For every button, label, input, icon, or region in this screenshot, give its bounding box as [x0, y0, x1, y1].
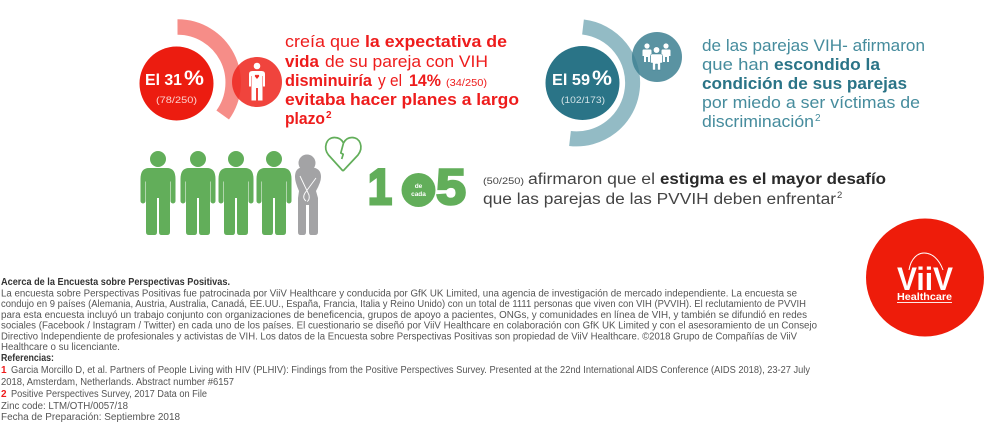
number: 1: 1 — [368, 159, 392, 215]
text: 31% description: y el — [378, 72, 402, 90]
circle: 31% badge: El 31 — [145, 72, 182, 89]
badge: de cada: cada — [411, 191, 426, 198]
text: 31% description: creía que — [285, 33, 360, 51]
text: 31% description: disminuiría — [285, 72, 373, 90]
text: 31% description: 14% — [409, 72, 441, 90]
text: 59% description: que han — [702, 56, 769, 74]
text: reference list: Positive Perspectives Survey, 2017 Data on File — [11, 389, 207, 400]
panel: 31% statistic — [140, 27, 519, 128]
text block: about the survey — [1, 277, 817, 423]
icon: grey person with crossed arms — [295, 154, 321, 235]
panel: 59% statistic — [546, 27, 925, 139]
text: 31% description — [285, 33, 519, 128]
text: 59% description: de las parejas VIH- afirmaron — [702, 37, 925, 55]
circle: 31% badge — [140, 46, 214, 120]
text: zinc code: Zinc code: LTM/OTH/0057/18 — [1, 401, 128, 412]
arc: red progress ring — [178, 27, 233, 115]
text: reference list: 1 — [1, 365, 7, 376]
circle: 59% badge: El 59 — [552, 72, 590, 89]
heading: about the survey: Acerca de la Encuesta sobre Perspectivas Positivas. — [1, 277, 230, 288]
icon: man with heart — [232, 57, 282, 107]
circle: 59% badge: % — [592, 67, 612, 90]
text: stigma description: estigma es el mayor desafío — [660, 171, 886, 188]
text: 59% description: condición de sus parejas — [702, 75, 907, 93]
text: 59% description: 2 — [815, 113, 821, 124]
text: survey paragraph: condujo en 9 países (Alemania, Austria, Australia, Canadá, EE.UU., España, Francia, Italia y Reino Unido) con un total de 1111 personas que viven con VIH (PVVIH). El reclutamiento de PVVIH — [1, 299, 806, 310]
number: 5: 5 — [436, 159, 466, 215]
icon: broken heart — [326, 138, 361, 171]
text: 31% description: 2 — [326, 110, 332, 121]
text: 59% description: escondido la — [774, 56, 881, 74]
text: 59% description: discriminación — [702, 113, 814, 131]
text: stigma description: que las parejas de las PVVIH deben enfrentar — [483, 191, 836, 208]
circle: 31% badge: % — [184, 67, 204, 90]
text: 59% description: por miedo a ser víctimas de — [702, 94, 920, 112]
badge: de cada — [402, 173, 436, 207]
text: survey paragraph — [1, 288, 817, 353]
text: stigma description: afirmaron que el — [528, 171, 655, 188]
text: 31% description: evitaba hacer planes a largo — [285, 91, 519, 109]
badge: de cada: de — [415, 183, 423, 190]
text: survey paragraph: sociales (Facebook / Instagram / Twitter) en cada uno de los países. El cuestionario se diseñó por ViiV Healthcare en colaboración con GfK UK Limited y con el asesoramiento de un Consejo — [1, 320, 817, 332]
text: preparation date: Fecha de Preparación: Septiembre 2018 — [1, 412, 180, 423]
text: 31% description: plazo — [285, 110, 325, 128]
text: reference list: 2 — [1, 389, 7, 400]
text: stigma description: (50/250) — [483, 176, 524, 186]
text: survey paragraph: Healthcare o su licenciante. — [1, 342, 120, 353]
heading: references: Referencias: — [1, 353, 54, 364]
text: 31% description: vida — [285, 53, 320, 71]
circle: 59% badge: (102/173) — [561, 95, 605, 106]
logo: ViiV Healthcare: Healthcare — [897, 292, 952, 303]
circle: 59% badge — [546, 46, 620, 120]
text: 31% description: (34/250) — [446, 78, 487, 89]
text: reference list: Garcia Morcillo D, et al. Partners of People Living with HIV (PLHIV): Findings from the Positive Perspectives Survey. Presented at the 22nd International AIDS Conference (AIDS 2018), 23-27 July — [11, 365, 810, 376]
icon: four green people — [140, 151, 292, 235]
text: reference list — [1, 365, 810, 400]
logo: ViiV Healthcare — [866, 218, 984, 336]
arc: teal progress ring — [570, 27, 633, 139]
icon: group of people — [632, 32, 682, 82]
text: survey paragraph: para esta encuesta incluyó un trabajo conjunto con organizaciones de beneficencia, grupos de apoyo a pacientes, ONGs, y comunidades en línea de VIH, y también se difundió en redes — [1, 310, 807, 321]
circle: 31% badge: (78/250) — [156, 95, 197, 106]
text: survey paragraph: Directivo Independiente de profesionales y activistas de VIH. Los datos de la Encuesta sobre Perspectivas Positivas son propiedad de ViiV Healthcare. ©2018 Grupo de Compañías de ViiV — [1, 332, 798, 342]
text: 31% description: de su pareja con VIH — [325, 53, 488, 71]
text: survey paragraph: La encuesta sobre Perspectivas Positivas fue patrocinada por ViiV Healthcare y conducida por GfK UK Limited, una agencia de investigación de mercado independiente. La encuesta se — [1, 288, 797, 300]
text: stigma description — [483, 171, 886, 208]
text: reference list: 2018, Amsterdam, Netherlands. Abstract number #6157 — [1, 377, 234, 388]
panel: 1 de cada 5 statistic — [140, 138, 886, 235]
text: 31% description: la expectativa de — [365, 33, 507, 51]
text: stigma description: 2 — [837, 190, 842, 201]
text: 59% description — [702, 37, 925, 131]
logo: ViiV Healthcare: ViiV — [897, 261, 954, 297]
